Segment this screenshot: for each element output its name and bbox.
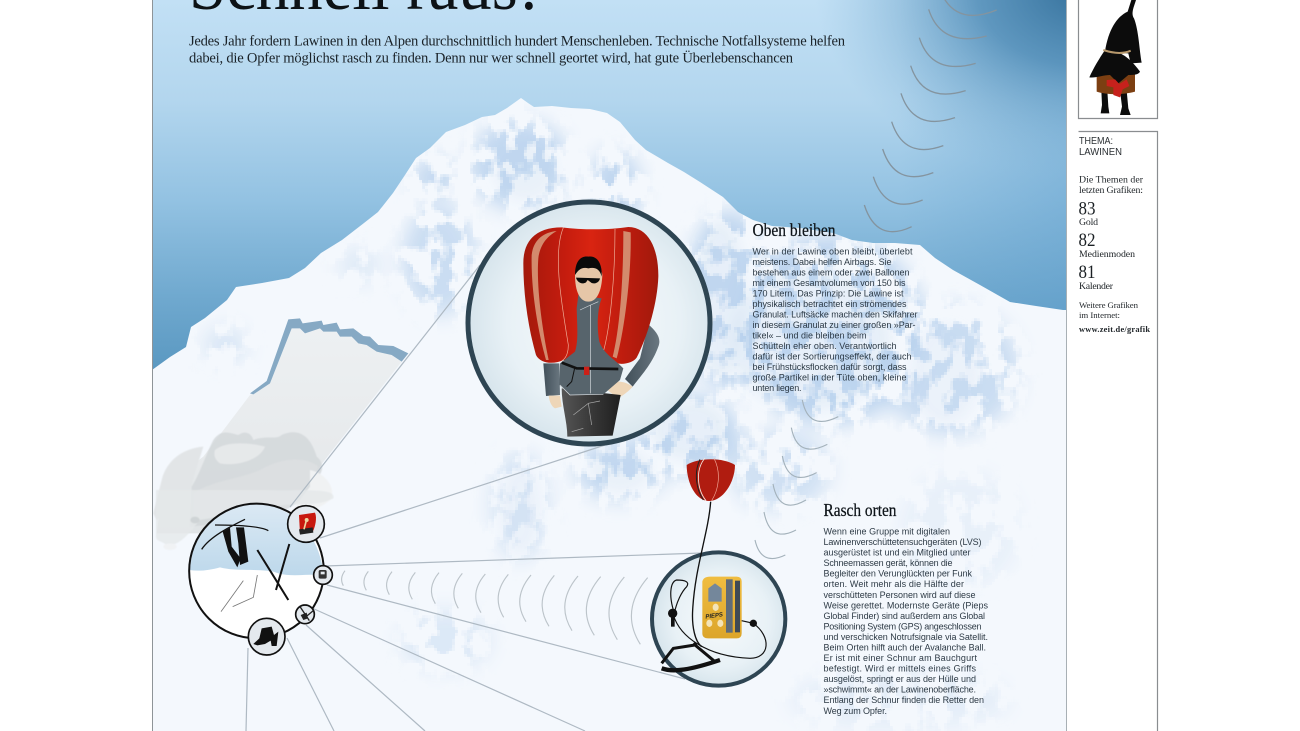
icon: rescue dog bbox=[248, 618, 285, 655]
text block: Rasch orten: Schneemassen gerät, können die bbox=[824, 558, 952, 568]
icon: airbag bbox=[288, 506, 324, 542]
text block: Rasch orten: Er ist mit einer Schnur am Bauchgurt bbox=[824, 653, 977, 663]
whistle and knob bbox=[668, 609, 757, 646]
red balloon bbox=[687, 458, 735, 501]
signal waves: to satellite bbox=[864, 0, 997, 232]
text block: Rasch orten: Weise gerettet. Modernste Geräte (Pieps bbox=[824, 600, 988, 610]
list of topics: Kalender bbox=[1079, 281, 1114, 292]
icon: rescue dog bbox=[1089, 0, 1142, 115]
text block: Rasch orten: ausgerüstet ist und ein Mitglied unter bbox=[824, 548, 970, 558]
list of topics: 82 bbox=[1078, 230, 1096, 251]
text block: Oben bleiben: in diesem Granulat zu einer großen »Par- bbox=[752, 320, 916, 330]
list heading bbox=[1079, 174, 1144, 196]
text block: Oben bleiben: 170 Litern. Das Prinzip: Die Lawine ist bbox=[752, 288, 904, 298]
disc bbox=[652, 552, 785, 686]
text block: Oben bleiben: große Partikel in der Tüte oben, kleine bbox=[752, 372, 906, 382]
hands bbox=[549, 382, 633, 408]
ring bbox=[468, 202, 710, 444]
list heading: letzten Grafiken: bbox=[1079, 185, 1143, 196]
text block: Rasch orten: Wenn eine Gruppe mit digitalen bbox=[824, 526, 950, 536]
list of topics: 83 bbox=[1078, 198, 1096, 220]
circle: man wearing airbag bbox=[468, 202, 710, 444]
background: sky bbox=[153, 0, 1066, 370]
torso bbox=[559, 295, 623, 395]
trousers bbox=[562, 388, 621, 437]
circle: avalanche ball and transceiver bbox=[652, 458, 785, 686]
text block: Rasch orten: Positioning System (GPS) angeschlossen bbox=[824, 621, 982, 631]
slab surface bbox=[157, 328, 402, 533]
text block: Rasch orten: Beim Orten hilft auch der Avalanche Ball. bbox=[824, 642, 986, 652]
intro text: Jedes Jahr fordern Lawinen in den Alpen durchschnittlich hundert Menschenleben. Technische Notfallsysteme helfen bbox=[189, 34, 846, 50]
scene disc bbox=[189, 504, 324, 638]
text block: Oben bleiben: bestehen aus einem oder zwei Ballonen bbox=[752, 268, 910, 278]
text block: Rasch orten: Entlang der Schnur finden die Retter den bbox=[824, 695, 984, 705]
PIEPS device bbox=[702, 577, 742, 638]
right arm bbox=[625, 324, 659, 387]
sidebar: dog box bbox=[1078, 0, 1158, 118]
circle: buried skier scene with equipment icons bbox=[189, 504, 332, 655]
web reference: www.zeit.de/grafik bbox=[1079, 325, 1150, 334]
label: Thema: THEMA: bbox=[1079, 136, 1113, 147]
text block: Rasch orten: verschütteten Personen wird auf diese bbox=[824, 590, 976, 600]
text block: Oben bleiben: mit einem Gesamtvolumen von 150 bis bbox=[752, 278, 906, 288]
skier silhouette bbox=[202, 519, 289, 612]
text block: Oben bleiben: unten liegen. bbox=[752, 383, 802, 393]
PIEPS device: PIEPS bbox=[705, 612, 723, 621]
text block: Oben bleiben: Wer in der Lawine oben bleibt, überlebt bbox=[752, 246, 913, 256]
text block: Oben bleiben: Schütteln eher oben. Verantwortlich bbox=[752, 341, 896, 351]
cords and harness bbox=[662, 502, 766, 670]
icon: transceiver bbox=[314, 566, 332, 584]
text block: Rasch orten: ausgelöst, springt er aus der Hülle und bbox=[824, 674, 976, 684]
fracture line bbox=[250, 318, 408, 394]
red airbag bbox=[523, 227, 658, 364]
list of topics bbox=[1078, 198, 1135, 292]
heading: Oben bleiben: Oben bleiben bbox=[752, 220, 836, 240]
web reference: im Internet: bbox=[1079, 310, 1120, 320]
background: snowy mountain bbox=[152, 90, 1066, 731]
list of topics: 81 bbox=[1078, 262, 1096, 283]
head with sunglasses bbox=[575, 256, 602, 302]
text block: Oben bleiben bbox=[752, 246, 918, 393]
label: Thema bbox=[1079, 136, 1122, 158]
text block: Oben bleiben: meistens. Dabei helfen Airbags. Sie bbox=[752, 257, 892, 267]
panel border lines bbox=[152, 0, 1066, 731]
signal waves: horizontal bbox=[342, 571, 648, 644]
text block: Oben bleiben: tikel« – und die bleiben beim bbox=[752, 330, 866, 340]
list of topics: Medienmoden bbox=[1079, 249, 1135, 260]
text block: Rasch orten: orten. Weit mehr als die Hälfte der bbox=[824, 579, 964, 589]
sidebar: themes box bbox=[1078, 132, 1158, 731]
avalanche: released snow slab bbox=[153, 318, 408, 533]
intro text: dabei, die Opfer möglichst rasch zu finden. Denn nur wer schnell geortet wird, hat gute Überlebenschancen bbox=[189, 50, 794, 66]
text block: Rasch orten: Global Finder) sind außerdem ans Global bbox=[824, 611, 985, 621]
intro text bbox=[189, 34, 846, 66]
text block: Rasch orten: und verschicken Notrufsignale via Satellit. bbox=[824, 632, 988, 642]
snow cloud bbox=[153, 432, 332, 527]
text block: Rasch orten bbox=[824, 526, 988, 716]
text block: Rasch orten: befestigt. Wird er mittels eines Griffs bbox=[824, 664, 976, 674]
signal waves: balloon to text bbox=[755, 400, 838, 559]
disc bbox=[468, 202, 710, 444]
list of topics: Gold bbox=[1079, 217, 1098, 228]
text block: Oben bleiben: dafür ist der Sortierungseffekt, der auch bbox=[752, 352, 912, 362]
heading: Rasch orten: Rasch orten bbox=[824, 500, 897, 520]
list heading: Die Themen der bbox=[1079, 174, 1144, 186]
icon: probe and shovel bbox=[296, 605, 314, 624]
connector lines bbox=[246, 265, 702, 731]
text block: Oben bleiben: physikalisch betrachtet ein strömendes bbox=[752, 299, 907, 309]
text block: Rasch orten: Weg zum Opfer. bbox=[824, 706, 887, 716]
web reference bbox=[1079, 300, 1150, 334]
web reference: Weitere Grafiken bbox=[1079, 300, 1139, 310]
text block: Rasch orten: »schwimmt« an der Lawinenoberfläche. bbox=[824, 685, 976, 695]
lower-left cloud base bbox=[156, 490, 334, 550]
text block: Rasch orten: Lawinenverschüttetensuchgeräten (LVS) bbox=[824, 537, 982, 547]
text block: Oben bleiben: Granulat. Luftsäcke machen den Skifahrer bbox=[752, 310, 918, 320]
text block: Oben bleiben: bei Frühstücksflocken dafür sorgt, dass bbox=[752, 362, 907, 372]
label: Thema: LAWINEN bbox=[1079, 147, 1122, 158]
text block: Rasch orten: Begleiter den Verunglückten per Funk bbox=[824, 569, 972, 579]
left arm bbox=[543, 363, 560, 396]
